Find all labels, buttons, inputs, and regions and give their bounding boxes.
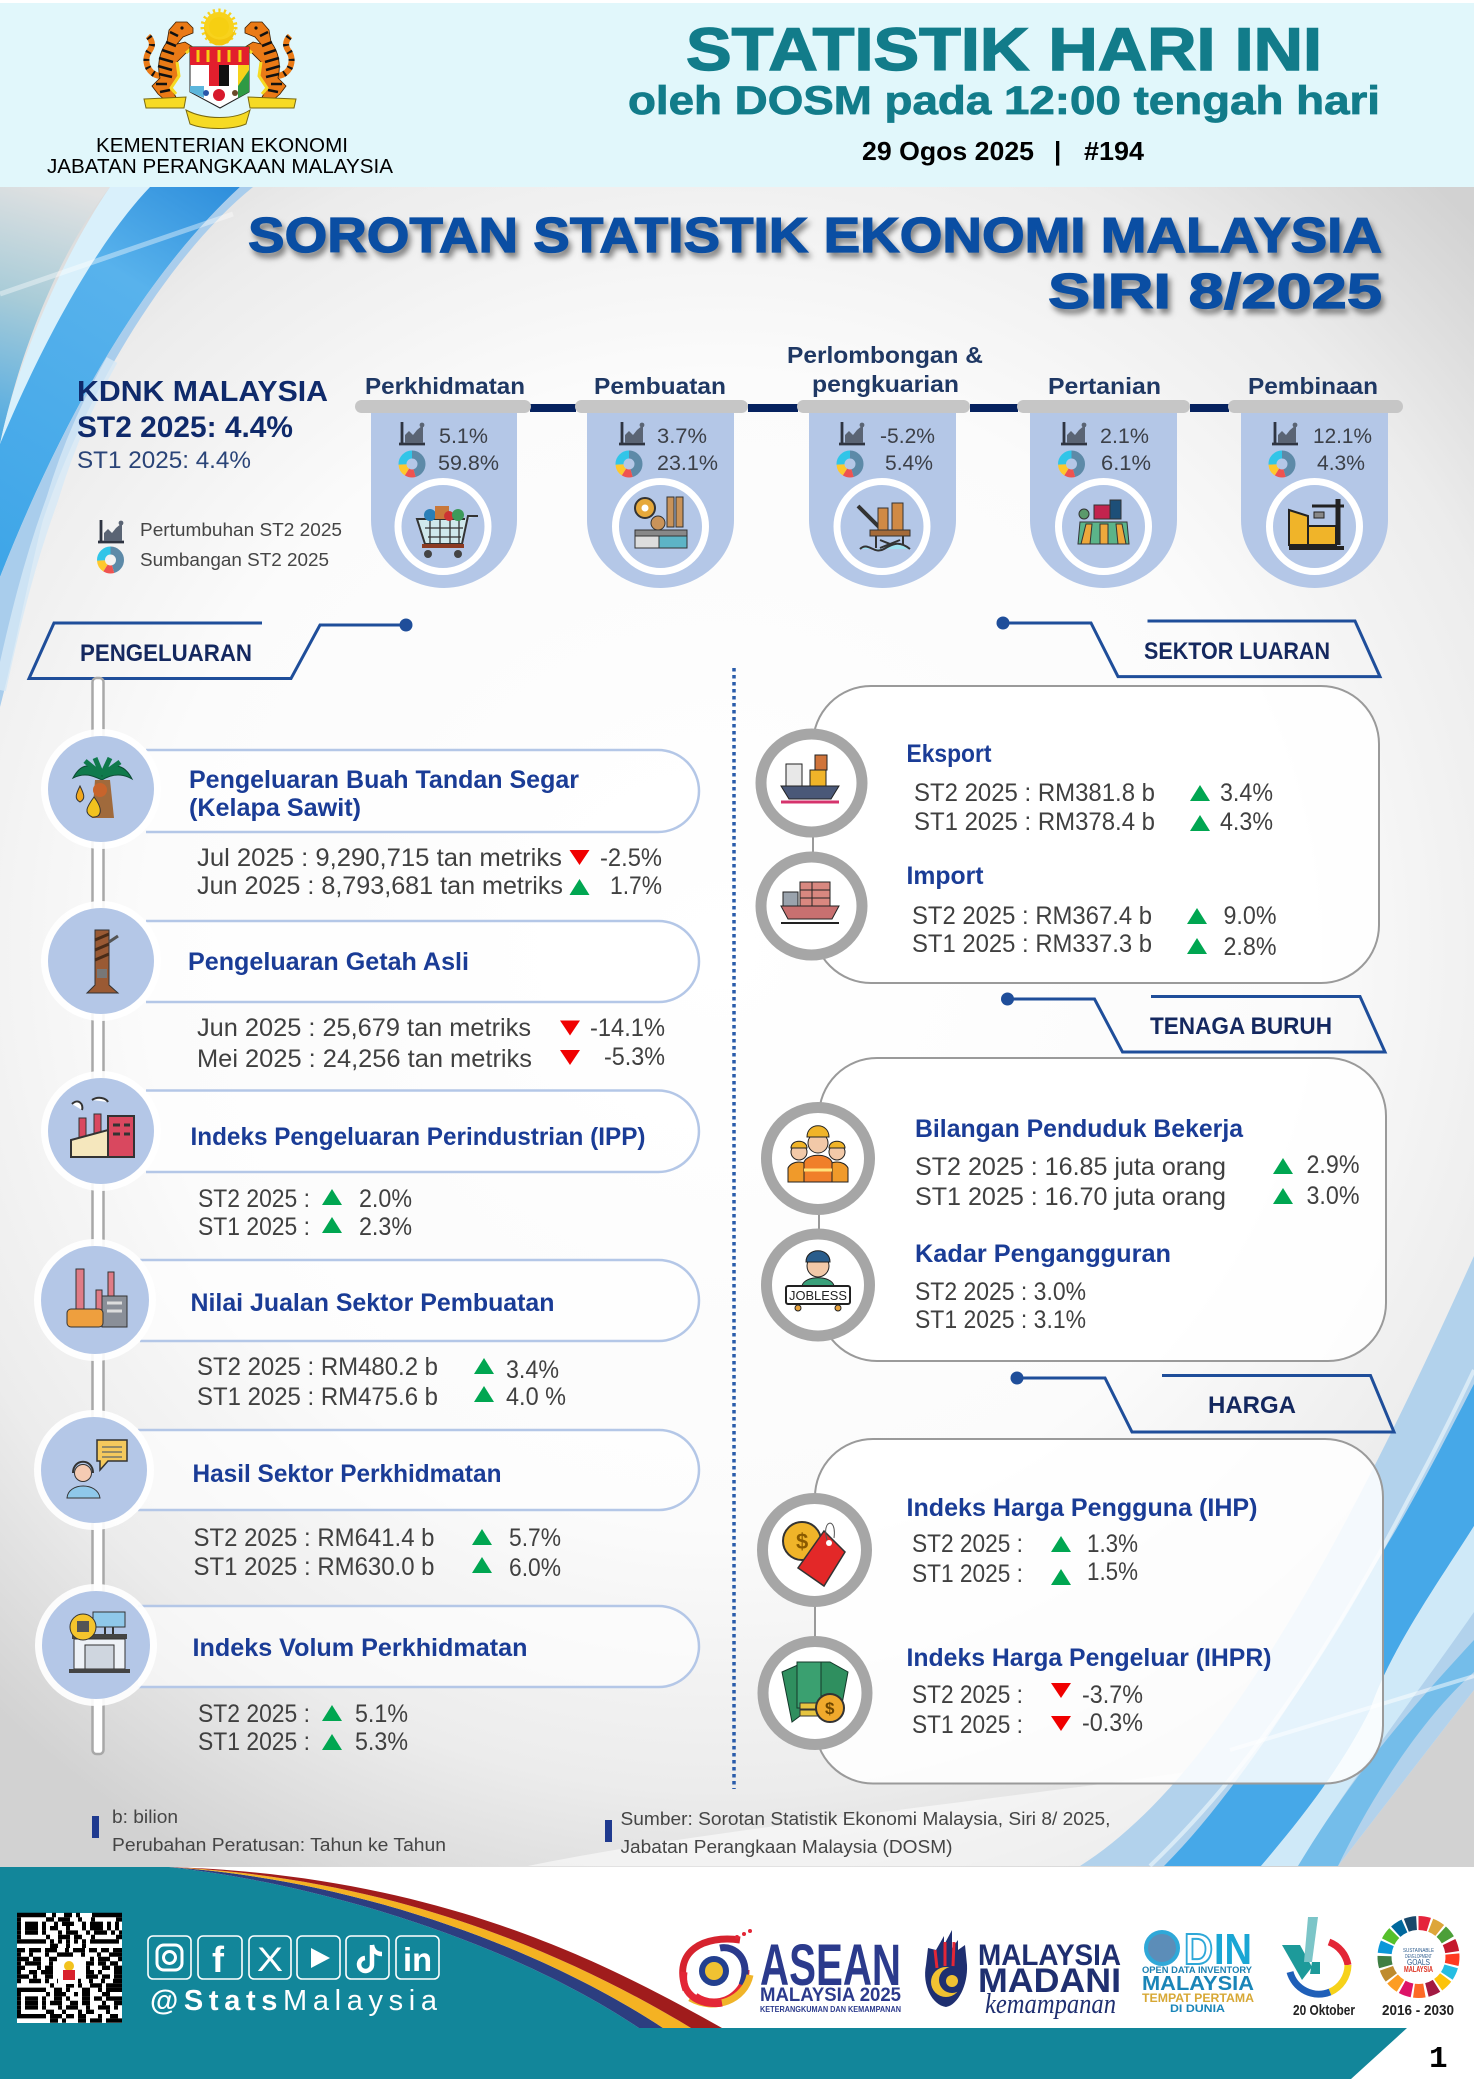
sector: Perkhidmatan: 5.1% xyxy=(439,424,488,448)
legend: Sumbangan ST2 2025 xyxy=(140,550,329,570)
panel: Sektor Luaran: 4.3% xyxy=(1220,808,1273,836)
panel: Harga: Indeks Harga Pengguna (IHP) xyxy=(906,1494,1258,1522)
item: Nilai Jualan Sektor Pembuatan: 3.4% xyxy=(506,1356,559,1384)
social media icons: f xyxy=(212,1939,225,1980)
item: Pengeluaran Buah Tandan Segar: -2.5% xyxy=(600,844,662,872)
ring: price tag xyxy=(762,1498,866,1602)
icon: construction crane xyxy=(1289,499,1344,550)
panel: Harga: Indeks Harga Pengeluar (IHPR) xyxy=(906,1644,1272,1672)
panel: Sektor Luaran: ST1 2025 : RM378.4 b xyxy=(914,808,1155,836)
icon: industrial factory xyxy=(71,1098,134,1157)
section tag: Pengeluaran: PENGELUARAN xyxy=(80,640,252,667)
QR code xyxy=(17,1913,122,2023)
footer band xyxy=(0,1867,1474,2079)
section tag: Harga: HARGA xyxy=(1208,1392,1296,1419)
item: Indeks Volum Perkhidmatan: 5.1% xyxy=(355,1700,408,1728)
sector: Perlombongan dan pengkuarian: Perlombongan & xyxy=(787,342,983,368)
item: Pengeluaran Buah Tandan Segar: (Kelapa Sawit) xyxy=(189,794,361,822)
panel: Harga: ST1 2025 : xyxy=(912,1711,1023,1739)
sector: Perkhidmatan: Perkhidmatan xyxy=(365,373,525,399)
icon: shopping cart xyxy=(417,506,478,558)
heading: Sorotan Statistik Ekonomi Malaysia: SIRI 8/2025 xyxy=(1048,265,1382,319)
logo: ASEAN Malaysia 2025: MALAYSIA 2025 xyxy=(760,1985,901,2006)
header band xyxy=(0,3,1474,187)
logo: SDG wheel: DEVELOPMENT xyxy=(1405,1954,1432,1960)
logo: ODIN Malaysia: MALAYSIA xyxy=(1142,1973,1254,1995)
panel: Harga: 1.5% xyxy=(1087,1558,1138,1586)
item: Nilai Jualan Sektor Pembuatan: 4.0 % xyxy=(506,1383,566,1411)
ministry name: KEMENTERIAN EKONOMI xyxy=(96,135,348,157)
ring: price tag: $ xyxy=(796,1529,808,1554)
heading: Sorotan Statistik Ekonomi Malaysia xyxy=(248,209,1382,319)
panel: Sektor Luaran: Eksport xyxy=(906,740,992,768)
section tag: Sektor Luaran: SEKTOR LUARAN xyxy=(1144,638,1330,665)
footnote: units xyxy=(92,1807,446,1855)
item: Pengeluaran Getah Asli xyxy=(41,901,699,1073)
footnote: source: Jabatan Perangkaan Malaysia (DOSM) xyxy=(620,1837,952,1857)
sector: Perlombongan dan pengkuarian: 5.4% xyxy=(885,451,933,475)
icon: Malaysia coat of arms xyxy=(144,12,296,128)
ring: money xyxy=(763,1642,867,1744)
sector: Pembinaan xyxy=(1228,373,1403,588)
ministry name xyxy=(47,135,394,178)
sector: Pembinaan: 12.1% xyxy=(1313,424,1372,448)
GDP summary: ST2 2025: 4.4% xyxy=(77,411,293,444)
logo: Malaysia Madani: MALAYSIA xyxy=(978,1939,1121,1972)
item: Hasil Sektor Perkhidmatan: 5.7% xyxy=(509,1524,561,1552)
ministry name: JABATAN PERANGKAAN MALAYSIA xyxy=(47,156,394,178)
panel: Sektor Luaran: ST2 2025 : RM381.8 b xyxy=(914,779,1155,807)
logo: SDG wheel: GOALS xyxy=(1407,1958,1430,1967)
icon: oil platform xyxy=(858,503,910,551)
sector: Pembuatan xyxy=(575,373,748,588)
logo: ASEAN Malaysia 2025: KETERANGKUMAN DAN KEMAMPANAN xyxy=(760,2005,901,2014)
logo: Hari Statistik Negara xyxy=(1282,1917,1355,2019)
item: Indeks Volum Perkhidmatan: Indeks Volum Perkhidmatan xyxy=(192,1634,528,1662)
panel: Sektor Luaran: 3.4% xyxy=(1220,779,1273,807)
logo: SDG wheel xyxy=(1370,1909,1467,2019)
sector: Perlombongan dan pengkuarian: -5.2% xyxy=(880,424,935,448)
logo: SDG wheel: SUSTAINABLE xyxy=(1403,1948,1435,1954)
panel: Tenaga Buruh xyxy=(766,1058,1386,1361)
decorative swoosh: top left xyxy=(0,187,253,707)
panel: Sektor Luaran: 9.0% xyxy=(1224,902,1276,930)
footnote: source xyxy=(605,1809,1110,1857)
item: Hasil Sektor Perkhidmatan xyxy=(34,1410,699,1582)
panel: Tenaga Buruh: Bilangan Penduduk Bekerja xyxy=(915,1115,1244,1143)
sector: Pembuatan: 3.7% xyxy=(657,424,707,448)
ring: jobless xyxy=(766,1234,870,1336)
logo: ASEAN Malaysia 2025 xyxy=(682,1929,901,2014)
icon: tractor on field xyxy=(1078,500,1129,544)
item: Hasil Sektor Perkhidmatan: Hasil Sektor Perkhidmatan xyxy=(192,1460,502,1488)
item: Nilai Jualan Sektor Pembuatan: Nilai Jualan Sektor Pembuatan xyxy=(190,1289,554,1317)
item: Pengeluaran Getah Asli: -14.1% xyxy=(590,1014,665,1042)
logo: Hari Statistik Negara: 20 Oktober xyxy=(1293,2002,1355,2019)
icon: service shop xyxy=(69,1612,130,1673)
item: Nilai Jualan Sektor Pembuatan: ST1 2025 : RM475.6 b xyxy=(197,1383,438,1411)
social media icons: in xyxy=(403,1941,432,1978)
item: Indeks Volum Perkhidmatan: 5.3% xyxy=(355,1728,408,1756)
GDP summary: KDNK MALAYSIA xyxy=(77,376,328,408)
panel: Harga: -3.7% xyxy=(1082,1681,1143,1709)
sector: Perkhidmatan xyxy=(355,373,531,588)
ring: jobless: JOBLESS xyxy=(789,1288,847,1303)
item: Hasil Sektor Perkhidmatan: ST2 2025 : RM641.4 b xyxy=(194,1524,434,1552)
panel: Sektor Luaran: Import xyxy=(906,862,984,890)
item: Hasil Sektor Perkhidmatan: 6.0% xyxy=(509,1554,561,1582)
item: Pengeluaran Getah Asli: Mei 2025 : 24,256 tan metriks xyxy=(197,1045,532,1073)
logo: Malaysia Madani: MADANI xyxy=(978,1962,1121,2000)
footnote: units: b: bilion xyxy=(112,1807,178,1827)
logo: ODIN Malaysia: TEMPAT PERTAMA xyxy=(1142,1991,1254,2005)
panel: Tenaga Buruh: ST1 2025 : 3.1% xyxy=(915,1306,1086,1334)
panel: Harga: ST2 2025 : xyxy=(912,1530,1023,1558)
item: Indeks Volum Perkhidmatan: ST1 2025 : xyxy=(198,1728,310,1756)
sector: Perlombongan dan pengkuarian: pengkuarian xyxy=(812,371,959,397)
panel: Harga: ST2 2025 : xyxy=(912,1681,1023,1709)
item: Pengeluaran Getah Asli: -5.3% xyxy=(604,1043,665,1071)
social handle: @StatsMalaysia xyxy=(150,1985,438,2017)
social media icons: X xyxy=(257,1941,283,1979)
logo: ASEAN Malaysia 2025: ASEAN xyxy=(760,1933,901,1998)
date and issue: 29 Ogos 2025 xyxy=(862,136,1034,166)
date and issue: #194 xyxy=(1084,136,1145,166)
panel: Harga: 1.3% xyxy=(1087,1530,1138,1558)
item: Indeks Pengeluaran Perindustrian: 2.3% xyxy=(359,1213,412,1241)
panel: Tenaga Buruh: 3.0% xyxy=(1306,1182,1360,1210)
panel: Harga xyxy=(762,1439,1383,1784)
logo: ODIN Malaysia: DI DUNIA xyxy=(1170,2003,1225,2015)
panel: Sektor Luaran: 2.8% xyxy=(1224,933,1276,961)
panel: Tenaga Buruh: 2.9% xyxy=(1306,1151,1360,1179)
item: Pengeluaran Buah Tandan Segar: 1.7% xyxy=(610,872,662,900)
decorative swoosh: bottom right xyxy=(528,1256,1474,1866)
logo: ODIN Malaysia: IN xyxy=(1214,1925,1252,1974)
logo: Malaysia Madani xyxy=(925,1930,1121,2020)
logo: ODIN Malaysia: OPEN DATA INVENTORY xyxy=(1142,1965,1253,1976)
sector: Pertanian: 2.1% xyxy=(1100,424,1149,448)
logo: ODIN Malaysia xyxy=(1142,1925,1254,2015)
icon: refinery xyxy=(67,1269,127,1327)
heading: Sorotan Statistik Ekonomi Malaysia: SOROTAN STATISTIK EKONOMI MALAYSIA xyxy=(248,209,1382,263)
GDP summary: ST1 2025: 4.4% xyxy=(77,447,251,474)
item: Pengeluaran Buah Tandan Segar: Jul 2025 : 9,290,715 tan metriks xyxy=(197,844,562,872)
ring: workers xyxy=(766,1108,870,1210)
section tag: Harga xyxy=(1010,1372,1394,1432)
item: Indeks Pengeluaran Perindustrian: ST1 2025 : xyxy=(198,1213,310,1241)
item: Pengeluaran Getah Asli: Pengeluaran Getah Asli xyxy=(188,948,469,976)
title: Statistik Hari Ini: STATISTIK HARI INI xyxy=(686,16,1322,83)
item: Indeks Pengeluaran Perindustrian: ST2 2025 : xyxy=(198,1185,310,1213)
item: Indeks Pengeluaran Perindustrian: 2.0% xyxy=(359,1185,412,1213)
title: Statistik Hari Ini: oleh DOSM pada 12:00 tengah hari xyxy=(628,79,1380,123)
panel: Tenaga Buruh: Kadar Pengangguran xyxy=(915,1240,1171,1268)
date and issue: | xyxy=(1054,136,1061,166)
sector connector bar xyxy=(530,404,1229,412)
panel: Sektor Luaran: ST2 2025 : RM367.4 b xyxy=(912,902,1152,930)
panel: Tenaga Buruh: ST2 2025 : 16.85 juta orang xyxy=(915,1153,1226,1181)
panel: Tenaga Buruh: ST1 2025 : 16.70 juta orang xyxy=(915,1183,1226,1211)
item: Nilai Jualan Sektor Pembuatan xyxy=(34,1239,699,1411)
item: Pengeluaran Buah Tandan Segar xyxy=(41,729,699,900)
sector: Pembuatan: Pembuatan xyxy=(594,373,726,399)
item: Hasil Sektor Perkhidmatan: ST1 2025 : RM630.0 b xyxy=(194,1553,434,1581)
panel: Sektor Luaran xyxy=(761,686,1379,983)
item: Indeks Pengeluaran Perindustrian xyxy=(41,1071,699,1241)
panel: Tenaga Buruh: ST2 2025 : 3.0% xyxy=(915,1278,1086,1306)
item: Pengeluaran Buah Tandan Segar: Jun 2025 : 8,793,681 tan metriks xyxy=(197,872,563,900)
item: Pengeluaran Getah Asli: Jun 2025 : 25,679 tan metriks xyxy=(197,1014,531,1042)
sector: Pembuatan: 23.1% xyxy=(657,451,718,475)
divider: dotted line xyxy=(732,668,736,1789)
sector: Pembinaan: 4.3% xyxy=(1317,451,1365,475)
icon: manufacturing plant xyxy=(635,497,687,548)
section tag: Tenaga Buruh: TENAGA BURUH xyxy=(1150,1013,1332,1040)
panel: Harga: ST1 2025 : xyxy=(912,1560,1023,1588)
sector: Pertanian: 6.1% xyxy=(1101,451,1151,475)
ring: Import xyxy=(761,857,862,955)
logo: Malaysia Madani: kemampanan xyxy=(985,1989,1116,2020)
icon: rubber tree xyxy=(87,930,118,993)
icon: customer service agent xyxy=(67,1440,127,1498)
ring: money: $ xyxy=(825,1699,835,1718)
section tag: Pengeluaran xyxy=(29,618,412,678)
logo: SDG wheel: 2016 - 2030 xyxy=(1382,2002,1454,2019)
GDP summary xyxy=(77,376,328,474)
page number: 1 xyxy=(1429,2042,1448,2077)
date and issue xyxy=(862,136,1145,166)
panel: Sektor Luaran: ST1 2025 : RM337.3 b xyxy=(912,930,1152,958)
legend: Pertumbuhan ST2 2025 xyxy=(140,520,342,540)
item: Indeks Volum Perkhidmatan xyxy=(35,1584,699,1756)
item: Indeks Volum Perkhidmatan: ST2 2025 : xyxy=(198,1700,310,1728)
panel: Harga: -0.3% xyxy=(1082,1709,1143,1737)
section tag: Sektor Luaran xyxy=(996,616,1380,677)
sector: Pertanian: Pertanian xyxy=(1048,373,1161,399)
timeline rail xyxy=(92,678,104,1754)
legend xyxy=(98,520,342,570)
section tag: Tenaga Buruh xyxy=(1001,992,1385,1052)
sector: Perlombongan dan pengkuarian xyxy=(787,342,983,588)
footnote: units: Perubahan Peratusan: Tahun ke Tahun xyxy=(112,1835,446,1855)
sector: Perkhidmatan: 59.8% xyxy=(438,451,499,475)
logo: SDG wheel: MALAYSIA xyxy=(1404,1965,1433,1974)
item: Indeks Pengeluaran Perindustrian: Indeks Pengeluaran Perindustrian (IPP) xyxy=(190,1123,646,1151)
icon: oil palm xyxy=(73,758,132,818)
footnote: source: Sumber: Sorotan Statistik Ekonomi Malaysia, Siri 8/ 2025, xyxy=(620,1809,1110,1829)
social media icons xyxy=(148,1936,439,1980)
title: Statistik Hari Ini xyxy=(628,16,1380,123)
item: Pengeluaran Buah Tandan Segar: Pengeluaran Buah Tandan Segar xyxy=(189,766,579,794)
item: Nilai Jualan Sektor Pembuatan: ST2 2025 : RM480.2 b xyxy=(197,1353,438,1381)
ring: Eksport xyxy=(761,734,862,832)
sector: Pertanian xyxy=(1017,373,1190,588)
sector: Pembinaan: Pembinaan xyxy=(1248,373,1378,399)
logo: ODIN Malaysia: D xyxy=(1184,1925,1213,1974)
